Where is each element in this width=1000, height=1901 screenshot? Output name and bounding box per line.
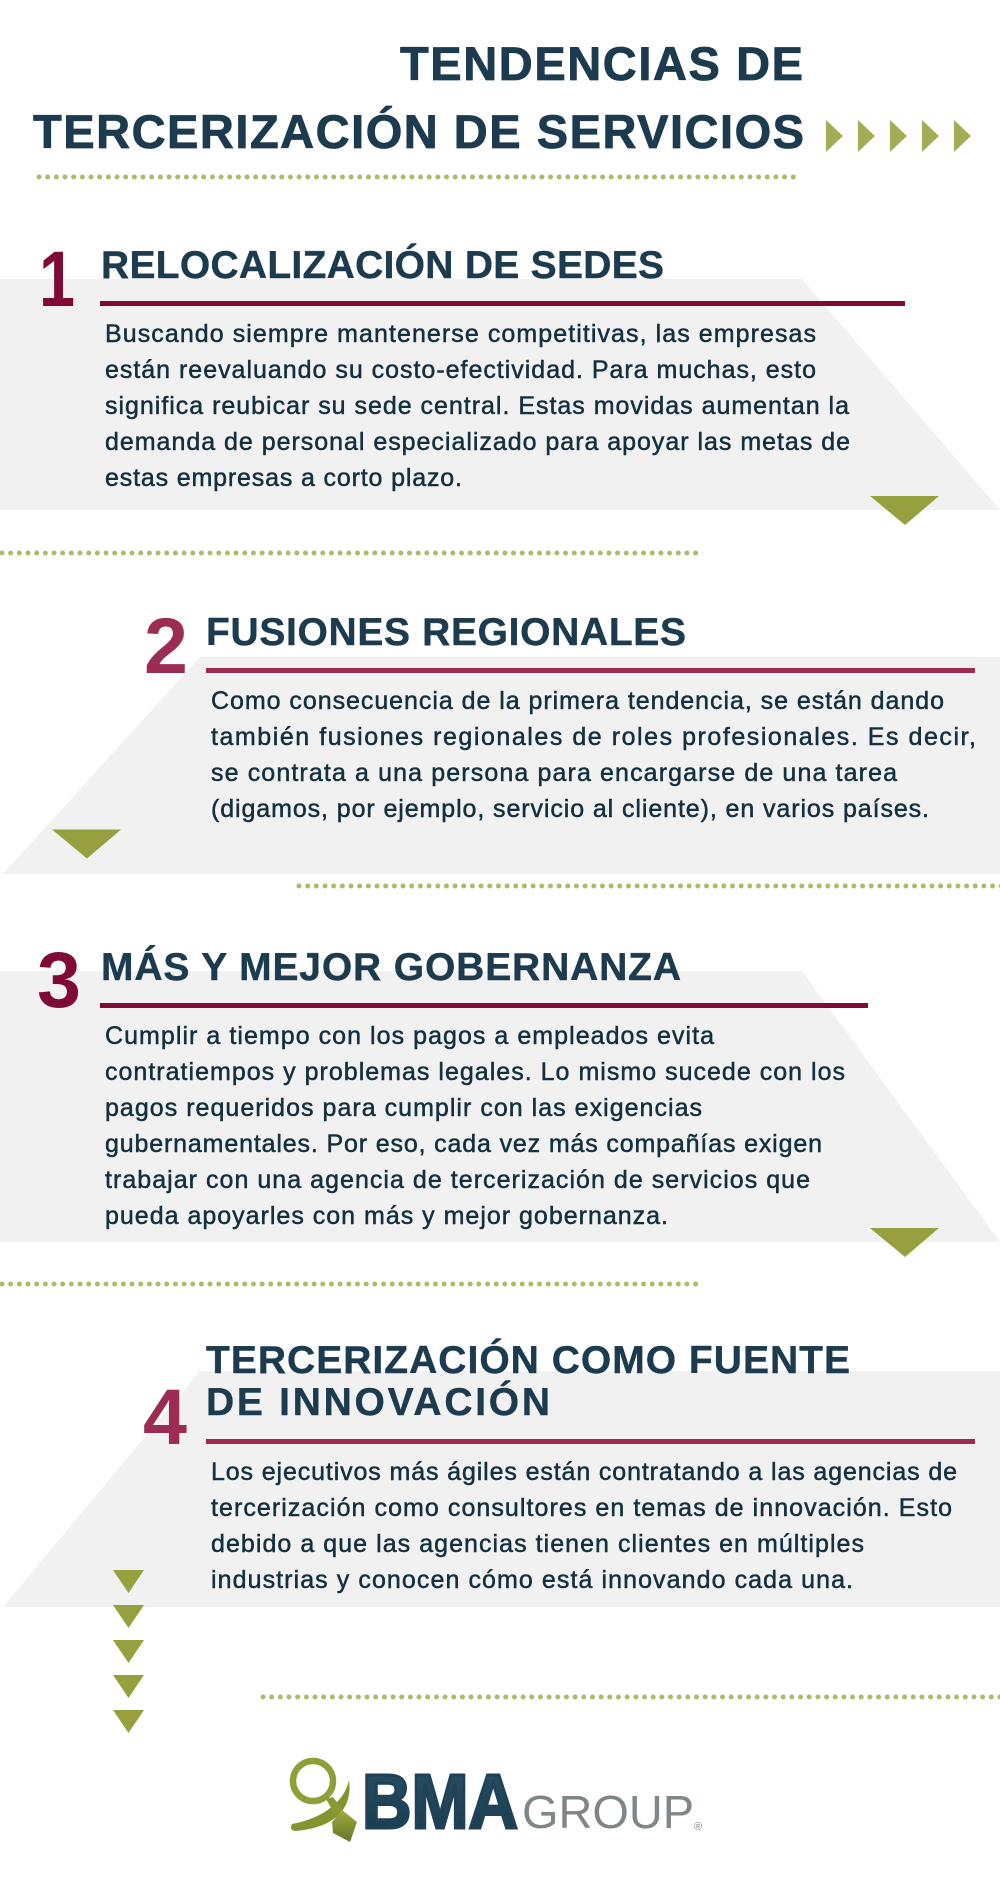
- number 1: 1: [39, 234, 75, 323]
- body text 3: pueda apoyarles con más y mejor gobernanza.: [105, 1202, 668, 1230]
- number 2: 2: [144, 601, 188, 690]
- icon: down arrow 3: [870, 1228, 939, 1257]
- rule 4: [206, 1439, 975, 1444]
- body text 4: tercerización como consultores en temas de innovación. Esto: [211, 1494, 952, 1522]
- logo wordmark BMA: BMA: [362, 1759, 518, 1845]
- body text 2: Como consecuencia de la primera tendencia, se están dando: [211, 687, 944, 715]
- heading 4: TERCERIZACIÓN COMO FUENTE: [206, 1338, 850, 1382]
- icon: column of down arrows: [113, 1570, 144, 1733]
- body text 4: industrias y conocen cómo está innovando cada una.: [211, 1566, 853, 1594]
- title: TERCERIZACIÓN DE SERVICIOS: [33, 105, 804, 158]
- icon: magnifier and tie: [291, 1761, 357, 1842]
- body text 3: trabajar con una agencia de tercerización de servicios que: [105, 1166, 810, 1194]
- logo: BMA Group: [291, 1759, 702, 1845]
- rule 3: [100, 1003, 868, 1008]
- rule 1: [100, 301, 905, 306]
- heading 4: DE INNOVACIÓN: [206, 1380, 550, 1424]
- rule 2: [206, 668, 975, 673]
- title: TENDENCIAS DE: [400, 37, 803, 90]
- body text 4: Los ejecutivos más ágiles están contratando a las agencias de: [211, 1458, 957, 1486]
- body text 2: también fusiones regionales de roles profesionales. Es decir,: [211, 723, 976, 751]
- panel: más y mejor gobernanza: [0, 935, 1000, 1257]
- body text 4: [211, 1458, 957, 1594]
- body text 1: están reevaluando su costo-efectividad. Para muchas, esto: [105, 356, 816, 384]
- panel: tercerización como fuente de innovación: [3, 1338, 1000, 1607]
- icon: down arrow 2: [52, 830, 121, 858]
- body text 2: (digamos, por ejemplo, servicio al cliente), en varios países.: [211, 795, 929, 823]
- icon: row of right-pointing arrows: [826, 120, 971, 152]
- heading 3: MÁS Y MEJOR GOBERNANZA: [101, 945, 681, 989]
- registered mark: ®: [694, 1821, 702, 1833]
- body text 1: demanda de personal especializado para apoyar las metas de: [105, 428, 850, 456]
- body text 3: gubernamentales. Por eso, cada vez más compañías exigen: [105, 1130, 822, 1158]
- body text 2: se contrata a una persona para encargarse de una tarea: [211, 759, 897, 787]
- body text 1: estas empresas a corto plazo.: [105, 464, 462, 492]
- icon: down arrow 1: [870, 496, 939, 525]
- body text 1: significa reubicar su sede central. Estas movidas aumentan la: [105, 392, 849, 420]
- heading 1: RELOCALIZACIÓN DE SEDES: [101, 243, 664, 287]
- body text 3: pagos requeridos para cumplir con las exigencias: [105, 1094, 702, 1122]
- panel: fusiones regionales: [3, 601, 1000, 874]
- body text 1: [105, 320, 850, 492]
- panel: relocalización de sedes: [0, 234, 1000, 525]
- heading 4: [206, 1338, 850, 1424]
- body text 3: [105, 1022, 845, 1230]
- body text 3: contratiempos y problemas legales. Lo mismo sucede con los: [105, 1058, 845, 1086]
- logo wordmark GROUP: GROUP: [522, 1786, 694, 1838]
- number 3: 3: [37, 935, 81, 1024]
- heading 2: FUSIONES REGIONALES: [206, 611, 686, 654]
- body text 3: Cumplir a tiempo con los pagos a empleados evita: [105, 1022, 714, 1050]
- body text 1: Buscando siempre mantenerse competitivas, las empresas: [105, 320, 816, 348]
- body text 4: debido a que las agencias tienen clientes en múltiples: [211, 1530, 864, 1558]
- body text 2: [211, 687, 976, 823]
- title: [33, 37, 804, 158]
- number 4: 4: [143, 1372, 187, 1461]
